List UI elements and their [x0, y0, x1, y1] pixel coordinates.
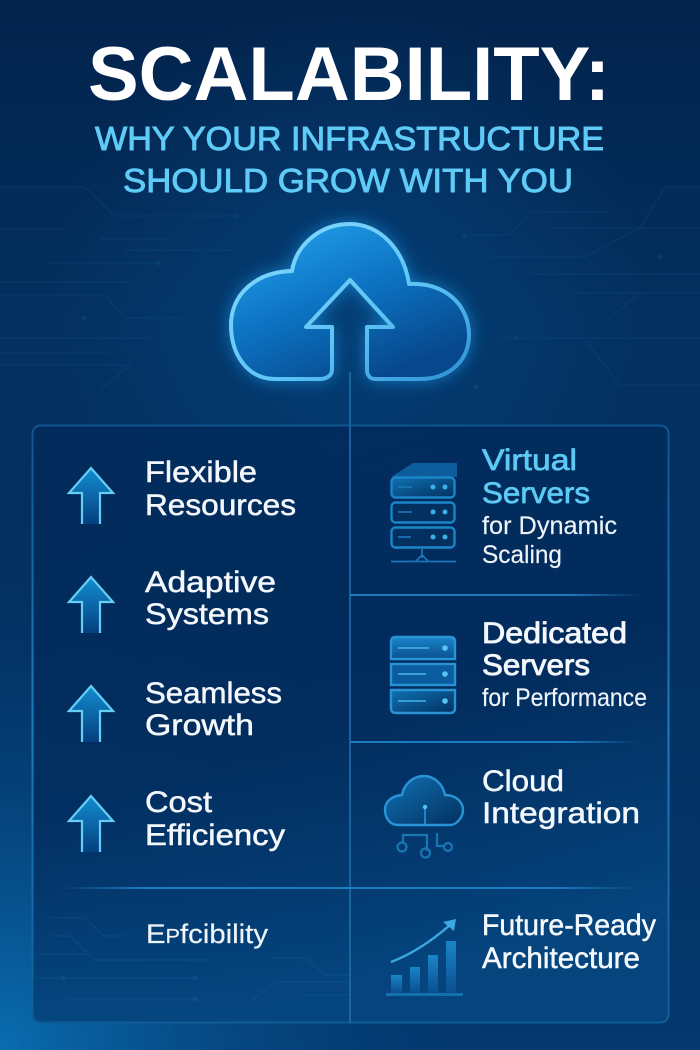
text: Dedicated Servers: Servers: [482, 649, 590, 682]
text: for Performance: for Performance: [482, 684, 647, 712]
icon: up arrow: [69, 468, 113, 524]
connector line: [349, 372, 351, 1023]
item: Cost Efficiency: [69, 786, 285, 852]
text: Dedicated Servers: Dedicated: [482, 617, 627, 650]
item: Seamless Growth: [69, 677, 282, 742]
text: Cloud Integration: Cloud: [482, 765, 564, 798]
text: Adaptive Systems: [145, 566, 276, 631]
text: Virtual Servers: Servers: [482, 477, 590, 510]
text: Epfcibility: EPfcibility: [146, 919, 269, 949]
text: Flexible Resources: [145, 456, 296, 522]
icon: network cloud: [385, 776, 463, 858]
item: Dedicated Servers: [391, 617, 647, 713]
text: Seamless Growth: Seamless: [145, 677, 282, 710]
item: Virtual Servers: [391, 444, 617, 569]
text: Flexible Resources: Resources: [145, 489, 296, 522]
icon: cloud with up arrow: [231, 224, 469, 379]
text: for Dynamic Scaling: for Dynamic: [482, 512, 617, 540]
text: Cost Efficiency: Efficiency: [145, 819, 285, 852]
subtitle: SHOULD GROW WITH YOU: [123, 162, 573, 199]
icon: virtual server stack: [391, 463, 457, 562]
text: Cloud Integration: [482, 765, 640, 830]
subtitle: [95, 120, 604, 199]
divider lines: [60, 594, 640, 889]
icon: growth chart: [386, 919, 463, 996]
text: Flexible Resources: Flexible: [145, 456, 257, 489]
icon: up arrow: [69, 796, 113, 852]
text: Virtual Servers: Virtual: [482, 444, 577, 477]
text: Seamless Growth: Growth: [145, 709, 254, 742]
item: Adaptive Systems: [69, 566, 276, 633]
text: Adaptive Systems: Adaptive: [145, 566, 276, 599]
text: Dedicated Servers: [482, 617, 627, 682]
text: Future-Ready Architecture: Architecture: [482, 942, 640, 975]
icon: up arrow: [69, 686, 113, 742]
lower panel traces: [35, 918, 350, 1002]
panel: [32, 426, 668, 1022]
text: Seamless Growth: [145, 677, 282, 742]
icon: up arrow: [69, 577, 113, 633]
item: Cloud Integration: [385, 765, 640, 858]
text: Cost Efficiency: [145, 786, 285, 852]
text: Future-Ready Architecture: [482, 909, 656, 975]
item: Flexible Resources: [69, 456, 296, 524]
text: for Dynamic Scaling: Scaling: [482, 541, 562, 569]
text: for Dynamic Scaling: [482, 512, 617, 569]
text: Future-Ready Architecture: Future-Ready: [482, 909, 656, 942]
text: Virtual Servers: [482, 444, 590, 510]
subtitle: WHY YOUR INFRASTRUCTURE: [95, 120, 604, 157]
icon: dedicated server stack: [391, 637, 455, 713]
circuit traces: [0, 187, 700, 390]
title: SCALABILITY:: [88, 32, 610, 117]
text: Cost Efficiency: Cost: [145, 786, 213, 819]
text: Adaptive Systems: Systems: [145, 598, 269, 631]
text: Cloud Integration: Integration: [482, 797, 640, 830]
item: Future-Ready Architecture: [386, 909, 656, 996]
